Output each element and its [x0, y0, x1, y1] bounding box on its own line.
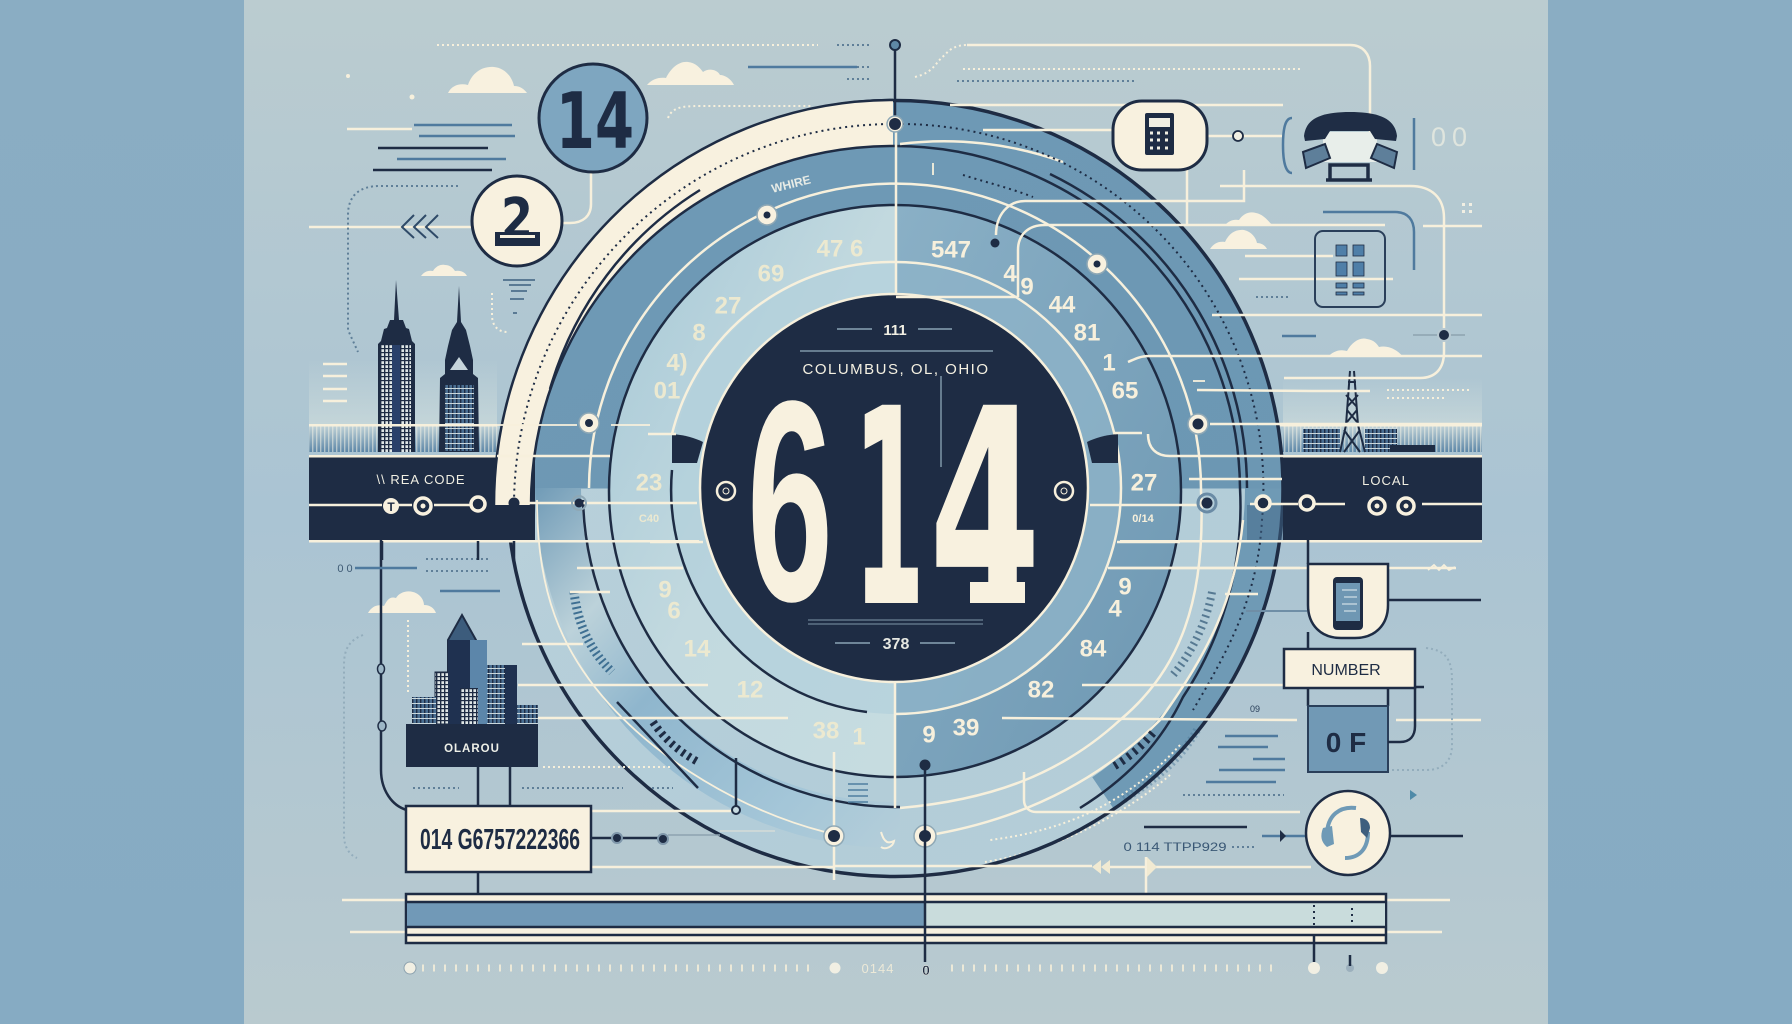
top-right double arcs — [893, 146, 1240, 808]
callout circle 14 — [539, 64, 647, 223]
tower two — [439, 286, 479, 452]
left dark connector — [378, 540, 514, 927]
inner blue right half — [895, 205, 1181, 777]
arrow chevrons lower — [1092, 857, 1157, 877]
band shade by right band — [1247, 505, 1283, 540]
mobile phone card — [1308, 540, 1481, 650]
dial numbers: 82 — [1028, 676, 1054, 704]
cream curved band — [494, 100, 895, 505]
number box: 014 G6757222366 — [420, 824, 580, 856]
centre dark circle — [672, 294, 1118, 682]
bottom progress bar — [406, 894, 1386, 943]
right dark outer edge redraw — [507, 100, 1283, 876]
decorative lines top left — [346, 74, 535, 313]
small dot grid — [1462, 203, 1472, 213]
lower left band — [558, 488, 900, 825]
readout below ring: 0 114 TTPP929 — [1124, 840, 1227, 854]
callout circle 2: 2 — [501, 187, 533, 252]
icon: smartphone — [1333, 577, 1363, 630]
curved tick text left — [574, 592, 612, 672]
dial numbers: 1 — [852, 724, 866, 750]
dial numbers: 4) — [666, 350, 688, 376]
area code band left — [309, 455, 699, 542]
label: local: LOCAL — [1362, 473, 1410, 488]
tower one — [378, 280, 415, 452]
small list icon — [848, 784, 868, 802]
dial numbers: 69 — [758, 260, 784, 288]
top label 111: 111 — [883, 322, 907, 339]
bottom scale: 0144 — [862, 961, 894, 976]
city icon — [412, 615, 538, 724]
dial numbers: 14 — [684, 636, 711, 662]
dial numbers: WHIRE — [770, 172, 812, 196]
dial numbers: 9 — [1020, 274, 1034, 300]
number label box — [1284, 649, 1424, 688]
dial numbers: 9 — [658, 576, 672, 604]
dial numbers: 9 — [1118, 574, 1132, 600]
white arc lower left — [537, 500, 825, 832]
dial numbers: 0/14 — [1132, 513, 1155, 525]
inner pale left half — [609, 205, 895, 777]
dial numbers: 12 — [737, 676, 763, 704]
dial numbers: 6 — [667, 598, 681, 624]
icon: building keypad panel — [1315, 231, 1385, 307]
inner ring band left — [669, 262, 895, 714]
dial numbers: 01 — [654, 378, 680, 404]
keypad button with calculator icon — [1113, 101, 1207, 170]
bottom scale: 0 — [922, 962, 930, 978]
centre vertical lines — [890, 40, 900, 808]
right skyline section — [1210, 371, 1482, 452]
concentric rings dial — [507, 40, 1283, 876]
lower left skyline and label — [406, 615, 538, 767]
main number 614: 4 — [929, 351, 1041, 668]
main number 614 — [747, 341, 1041, 668]
dial numbers: 4 — [1108, 596, 1122, 622]
side notch right — [1087, 434, 1118, 463]
dial numbers: 1 — [1102, 350, 1116, 376]
cream arcs lower right — [900, 491, 1202, 808]
icon: left inner dial — [717, 482, 735, 500]
ring nodes — [508, 116, 1216, 922]
dark ring lower left — [583, 500, 900, 807]
band nodes — [383, 496, 1414, 514]
dotted guides — [344, 45, 1470, 858]
left skyline section — [309, 280, 499, 452]
side notch left — [672, 434, 703, 463]
blue list lines: 09 — [1250, 704, 1260, 714]
label: area code: \\ REA CODE — [376, 472, 466, 487]
dial numbers: 9 — [922, 722, 936, 748]
background centre panel — [244, 0, 1548, 1024]
bottom label 378: 378 — [883, 636, 909, 653]
clouds — [368, 62, 1403, 613]
icon: calculator — [1145, 113, 1174, 155]
bottom label 378 — [808, 620, 983, 653]
right node and dash — [1282, 329, 1465, 341]
inner ring band right — [895, 262, 1121, 714]
callout circle 14: 14 — [556, 77, 634, 168]
lower-left small marker — [732, 758, 740, 814]
number label box: NUMBER — [1311, 662, 1381, 679]
squiggle arrow — [1428, 565, 1455, 570]
dial numbers: 47 6 — [817, 236, 863, 262]
location title: COLUMBUS, OL, OHIO — [802, 361, 990, 378]
main number 614: 6 — [747, 341, 833, 661]
small triangle marker — [1410, 790, 1417, 800]
number box connector nodes — [591, 833, 668, 844]
dial numbers: 84 — [1080, 636, 1107, 662]
icon: telephone — [1283, 112, 1414, 180]
dial numbers: 65 — [1112, 378, 1138, 404]
local band right — [1120, 455, 1482, 542]
dial numbers: 8 — [692, 320, 706, 346]
dial numbers: 44 — [1049, 292, 1076, 318]
dial numbers: 27 — [715, 292, 741, 320]
0F tile — [1308, 688, 1415, 772]
dial numbers: C40 — [639, 513, 659, 525]
small squiggle glyph — [881, 832, 894, 848]
bottom scale — [404, 765, 1388, 978]
dial numbers: 38 — [813, 718, 839, 744]
top-left mini readout — [337, 563, 500, 591]
icon: right inner dial — [1055, 482, 1073, 500]
dial numbers: 4 — [1003, 260, 1017, 288]
readout below ring — [1124, 827, 1256, 854]
text: double zero: 00 — [1431, 122, 1473, 152]
cloud — [448, 67, 527, 93]
upper blue half — [507, 100, 1283, 489]
arrow chevrons — [402, 215, 438, 238]
lower right blue band — [1103, 488, 1264, 793]
band nodes: T — [387, 500, 395, 514]
number box — [406, 806, 591, 872]
ring marker — [1233, 131, 1243, 141]
callout circle 2 — [472, 176, 562, 266]
curved tick text right — [1173, 592, 1212, 675]
horizontal connector lines — [309, 45, 1482, 932]
white ring upper — [589, 184, 1201, 491]
label: OLAROU — [444, 743, 500, 755]
icon: headset — [1321, 808, 1370, 858]
outer ring disc — [507, 100, 1283, 876]
dial numbers — [636, 172, 1157, 751]
blue rounded connector — [1323, 212, 1414, 270]
dial numbers: 81 — [1074, 320, 1100, 346]
main number 614: 1 — [853, 351, 925, 668]
top-left mini readout: 0 0 — [337, 563, 353, 575]
0F tile: 0 F — [1326, 727, 1366, 758]
blue list lines — [1183, 704, 1285, 795]
radio tower — [1340, 371, 1365, 452]
dial numbers: 39 — [953, 714, 979, 742]
dial numbers: 547 — [931, 236, 971, 264]
dial numbers: 23 — [636, 470, 662, 496]
dial numbers: 27 — [1131, 470, 1157, 496]
headset circle — [1262, 791, 1463, 875]
